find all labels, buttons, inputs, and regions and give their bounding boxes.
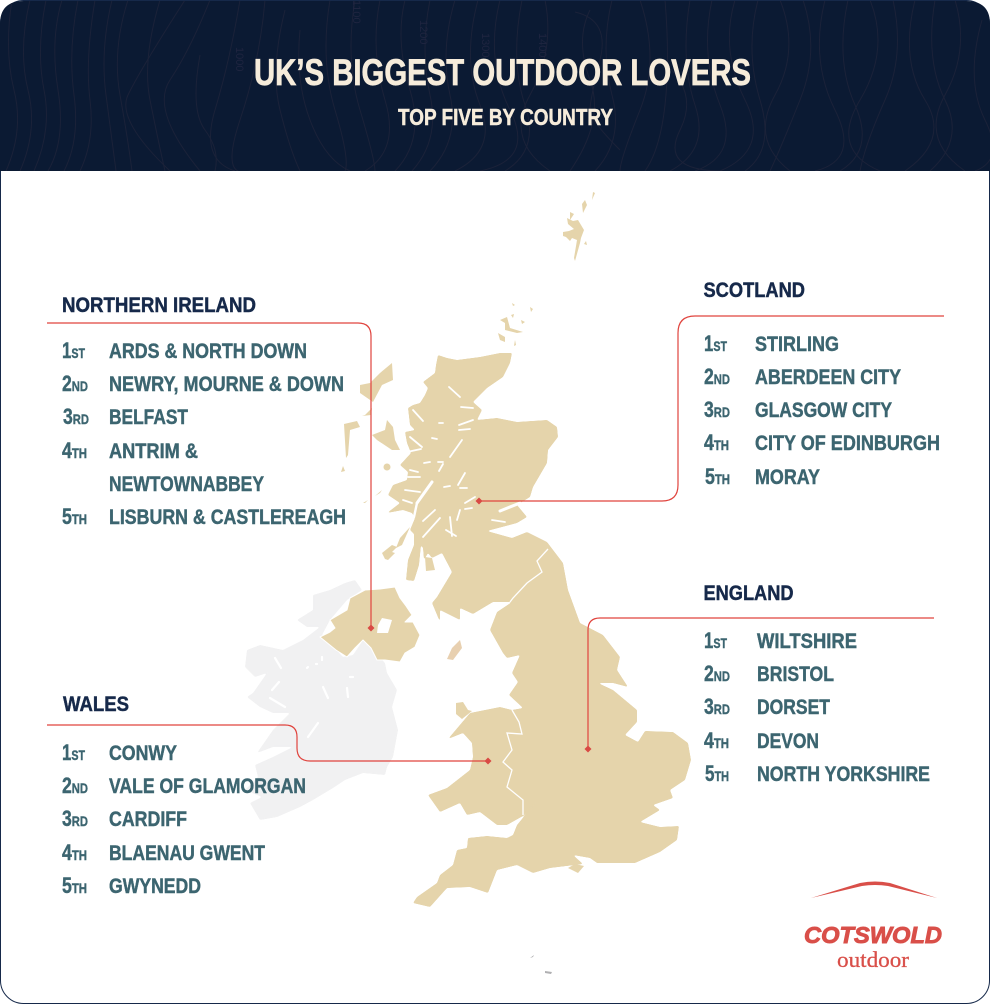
Anglesey — [456, 702, 472, 719]
contour elevation labels: 1200 — [417, 20, 429, 44]
list: England rankings — [704, 628, 930, 786]
Shetland — [563, 192, 595, 261]
list: England rankings: 3RD — [704, 694, 730, 719]
Hebrides and Scottish islands — [341, 303, 533, 571]
list: Scotland rankings: 5TH — [705, 464, 730, 489]
list: Northern Ireland rankings: 5TH — [62, 504, 87, 529]
list: England rankings: DORSET — [757, 696, 830, 719]
contour elevation labels: 1300 — [479, 33, 491, 57]
topographic contour pattern — [6, 0, 990, 172]
Republic of Ireland — [245, 580, 398, 820]
Northern Ireland — [320, 587, 420, 662]
connector: Scotland — [476, 316, 944, 504]
list: Wales rankings: 5TH — [62, 873, 87, 898]
list: Wales rankings: CONWY — [109, 742, 177, 765]
connector: England — [584, 618, 934, 752]
list: Scotland rankings: 1ST — [704, 331, 727, 356]
list: Northern Ireland rankings: LISBURN & CASTLEREAGH — [109, 506, 346, 529]
contour elevation labels: 1400 — [536, 33, 548, 57]
Great Britain mainland — [387, 353, 691, 907]
Scottish lochs — [403, 387, 520, 537]
list: Wales rankings: GWYNEDD — [109, 875, 201, 898]
list: Northern Ireland rankings: ARDS & NORTH DOWN — [109, 340, 307, 363]
contour elevation labels: 1000 — [233, 47, 245, 71]
logo subtitle: outdoor — [837, 947, 910, 972]
list: Northern Ireland rankings: 4TH — [62, 438, 87, 463]
logo: Cotswold Outdoor — [804, 882, 942, 972]
list: England rankings: NORTH YORKSHIRE — [757, 763, 930, 786]
list: Scotland rankings: CITY OF EDINBURGH — [755, 432, 940, 455]
panel: England — [704, 582, 930, 786]
logo roof arc — [811, 882, 937, 898]
list: Scotland rankings: 4TH — [704, 430, 729, 455]
logo wordmark: COTSWOLD — [804, 922, 942, 948]
list: England rankings: WILTSHIRE — [757, 630, 857, 653]
list: Scotland rankings: STIRLING — [755, 333, 839, 356]
list: Wales rankings: 2ND — [62, 773, 88, 798]
list: England rankings: 5TH — [705, 761, 729, 786]
list: Wales rankings: CARDIFF — [109, 808, 187, 831]
heading: Wales: WALES — [63, 693, 129, 716]
Isle of Wight — [568, 864, 584, 873]
list: Northern Ireland rankings: 3RD — [63, 404, 89, 429]
list: Wales rankings: 3RD — [62, 806, 88, 831]
list: Northern Ireland rankings: 1ST — [62, 338, 85, 363]
heading: England: ENGLAND — [704, 582, 794, 605]
list: England rankings: DEVON — [757, 730, 819, 753]
list: Scotland rankings — [704, 331, 940, 489]
header banner — [0, 0, 990, 172]
list: Wales rankings: 4TH — [62, 840, 87, 865]
list: England rankings: 2ND — [704, 661, 730, 686]
list: Northern Ireland rankings — [62, 338, 346, 529]
panel: Scotland — [704, 279, 940, 489]
Lough Neagh — [377, 618, 392, 633]
list: Northern Ireland rankings: NEWTOWNABBEY — [109, 473, 264, 496]
contour elevation labels — [233, 0, 548, 71]
England-Wales border — [503, 710, 523, 815]
list: Wales rankings: 1ST — [62, 740, 85, 765]
list: Northern Ireland rankings: NEWRY, MOURNE & DOWN — [109, 373, 344, 396]
title: UK’S BIGGEST OUTDOOR LOVERS — [254, 52, 751, 93]
list: England rankings: 4TH — [704, 728, 729, 753]
heading: Scotland: SCOTLAND — [704, 279, 805, 302]
list: Northern Ireland rankings: 2ND — [62, 371, 88, 396]
list: Wales rankings: BLAENAU GWENT — [109, 842, 265, 865]
list: Scotland rankings: MORAY — [755, 466, 820, 489]
connector: Northern Ireland — [47, 323, 374, 632]
panel: Northern Ireland — [62, 294, 346, 529]
Channel Islands — [530, 955, 552, 974]
subtitle: TOP FIVE BY COUNTRY — [398, 104, 613, 130]
Isle of Man — [447, 640, 462, 660]
list: England rankings: BRISTOL — [757, 663, 834, 686]
contour elevation labels: 1100 — [350, 0, 362, 24]
connector: Wales — [47, 725, 492, 764]
list: Scotland rankings: 3RD — [704, 397, 730, 422]
map of UK and Ireland — [245, 192, 691, 974]
Scotland-England border — [510, 549, 548, 602]
list: England rankings: 1ST — [704, 628, 727, 653]
Ireland loughs — [270, 657, 353, 737]
panel: Wales — [62, 693, 306, 898]
list: Scotland rankings: GLASGOW CITY — [755, 399, 892, 422]
heading: Northern Ireland: NORTHERN IRELAND — [62, 294, 256, 317]
list: Wales rankings: VALE OF GLAMORGAN — [109, 775, 306, 798]
list: Wales rankings — [62, 740, 306, 898]
list: Northern Ireland rankings: ANTRIM & — [109, 440, 198, 463]
list: Northern Ireland rankings: BELFAST — [109, 406, 188, 429]
list: Scotland rankings: 2ND — [704, 364, 730, 389]
list: Scotland rankings: ABERDEEN CITY — [755, 366, 901, 389]
